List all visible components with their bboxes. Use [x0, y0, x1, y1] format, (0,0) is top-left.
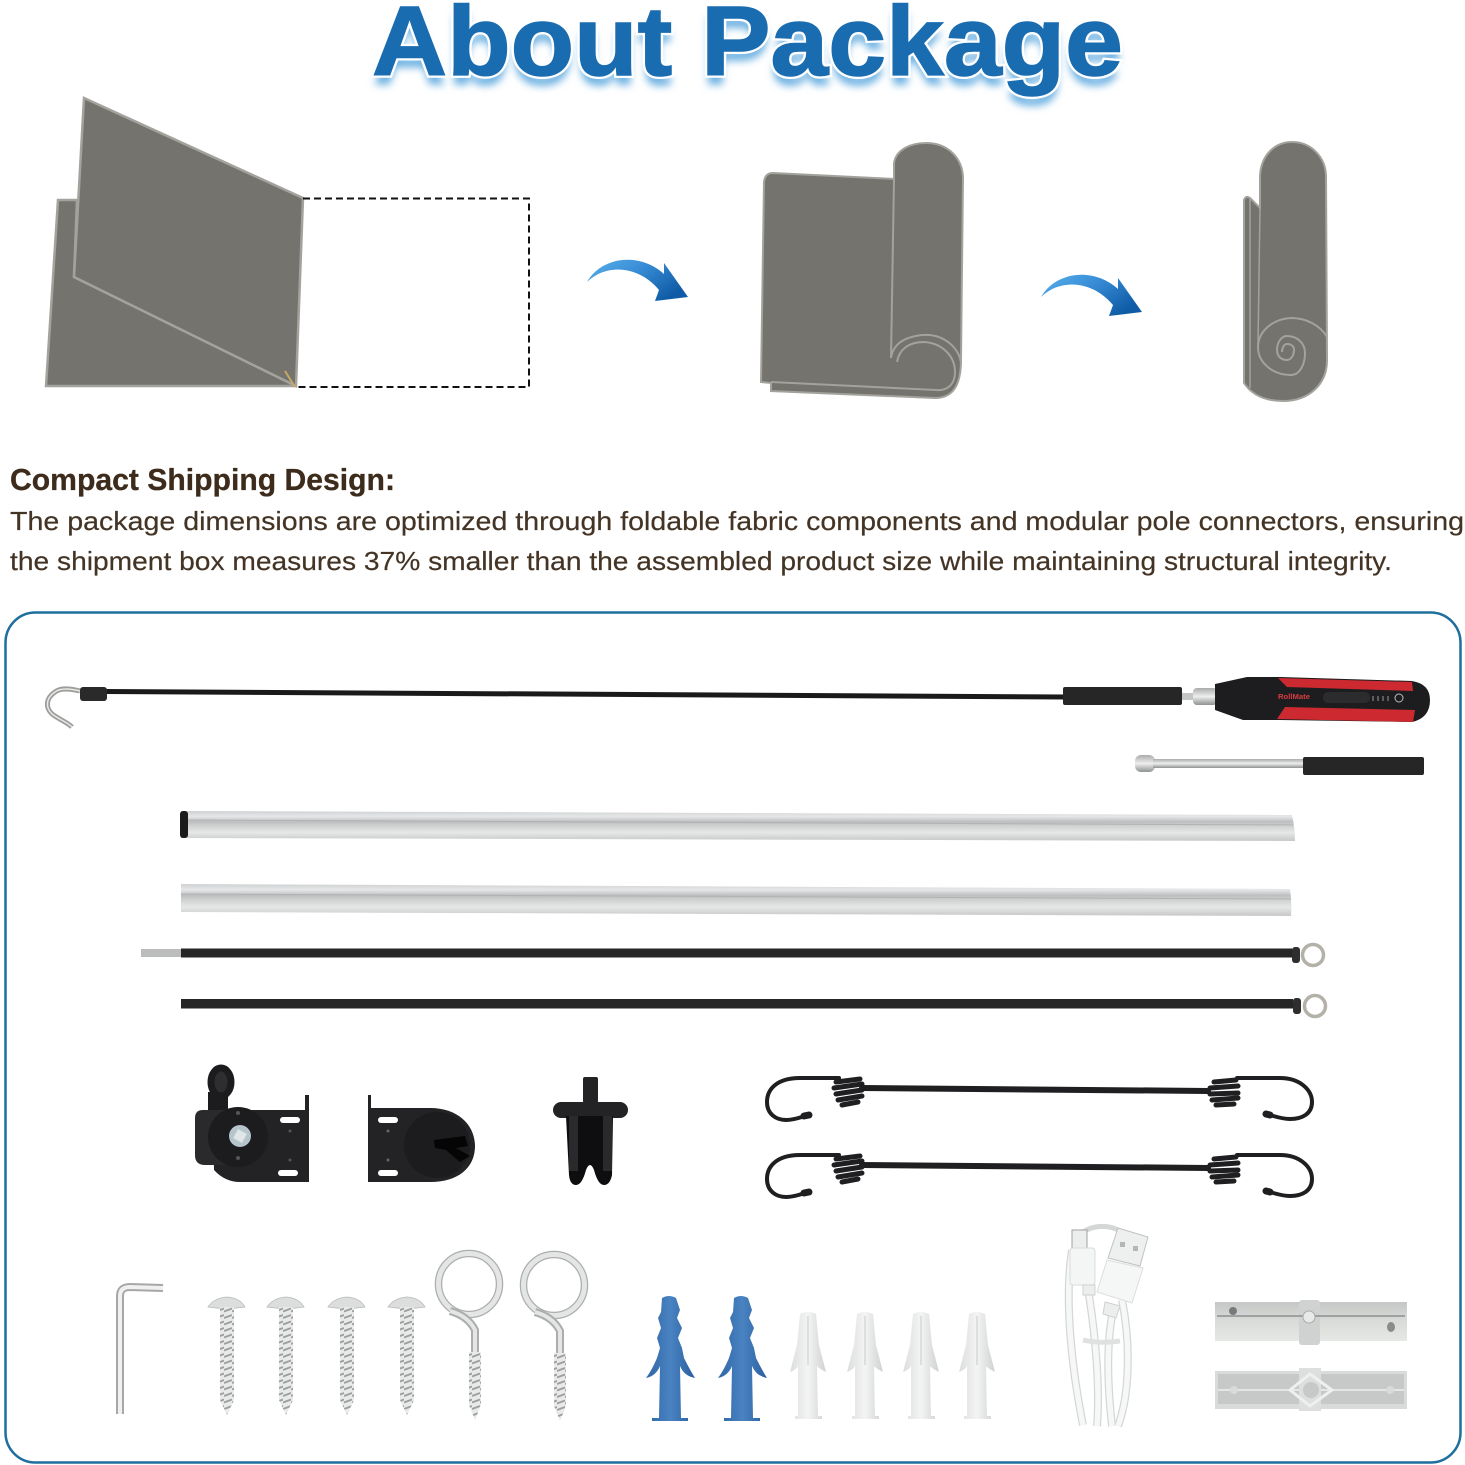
description text — [10, 506, 1464, 576]
white wall anchor 1 — [790, 1312, 826, 1419]
extension rod — [1135, 755, 1424, 775]
aluminum tube 2 — [181, 884, 1291, 916]
screw 1 — [208, 1297, 245, 1415]
description text: The package dimensions are optimized through foldable fabric components and modular pole connectors, ensuring — [10, 506, 1464, 536]
white wall anchor 4 — [959, 1312, 995, 1419]
blue wall anchor 2 — [718, 1296, 767, 1421]
panel: package contents — [6, 612, 1460, 1462]
hook pole with screwdriver: RollMate — [1278, 692, 1310, 701]
eye screw 1 — [438, 1254, 500, 1420]
connector tube closed — [1215, 1300, 1407, 1345]
end bracket — [368, 1095, 475, 1182]
white wall anchor 3 — [903, 1312, 939, 1419]
heading: compact shipping design: Compact Shipping Design: — [10, 462, 395, 497]
rolled fabric step 3 — [1244, 142, 1327, 401]
screw 3 — [328, 1297, 365, 1415]
screw 4 — [388, 1297, 425, 1415]
white wall anchor 2 — [847, 1312, 883, 1419]
arrow: step 1 to 2 — [587, 260, 688, 301]
hook pole with screwdriver — [47, 677, 1430, 727]
USB cable — [1069, 1226, 1148, 1426]
allen key — [120, 1287, 163, 1414]
bungee cord 1 — [767, 1078, 1312, 1120]
blue wall anchor 1 — [646, 1296, 695, 1421]
connector tube open — [1215, 1368, 1407, 1411]
plastic plug — [553, 1077, 628, 1185]
crank bracket — [195, 1068, 309, 1182]
folded fabric step 1 — [46, 98, 529, 387]
screw 2 — [267, 1297, 304, 1415]
bungee cord 2 — [767, 1155, 1312, 1197]
description text: the shipment box measures 37% smaller than the assembled product size while maintaining structural integrity. — [10, 546, 1392, 576]
rolled fabric step 2 — [761, 143, 963, 398]
eye screw 2 — [524, 1254, 584, 1421]
black rod with pin and ring — [141, 944, 1324, 966]
black rod with ring — [181, 996, 1326, 1016]
aluminum tube 1 — [180, 811, 1295, 841]
arrow: step 2 to 3 — [1041, 275, 1142, 316]
